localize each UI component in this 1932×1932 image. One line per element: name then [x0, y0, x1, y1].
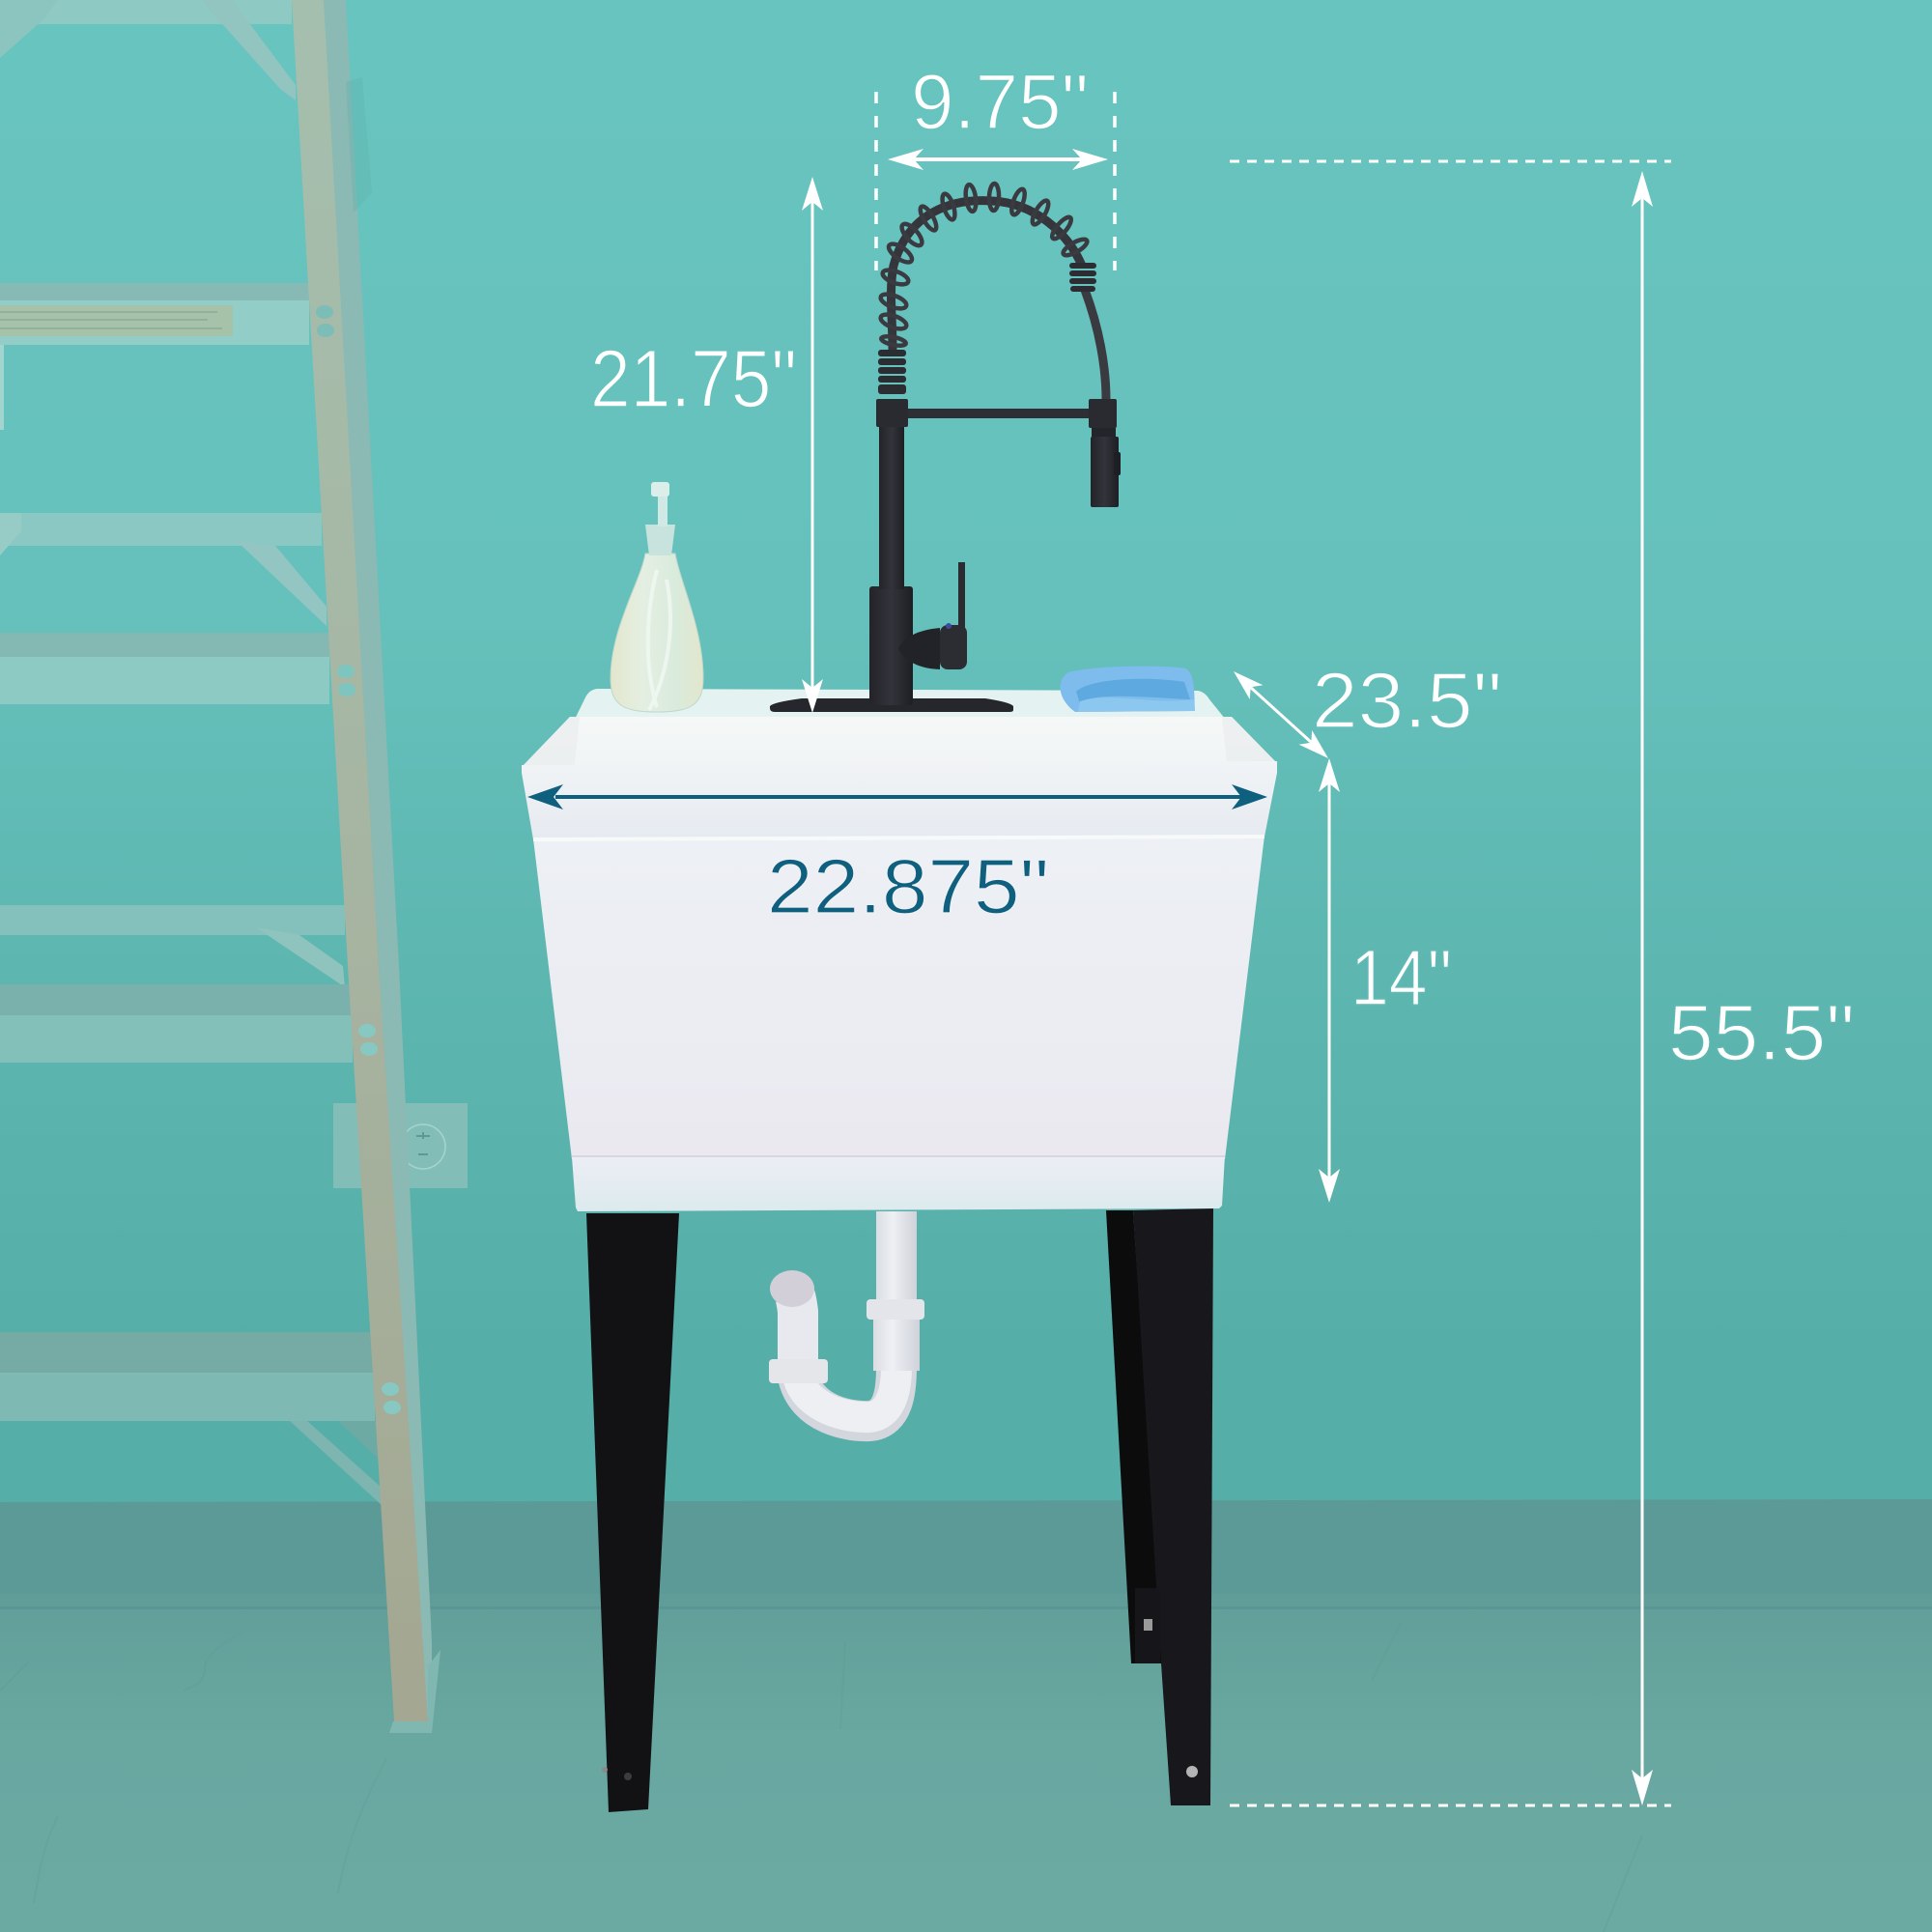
bottom lip: [572, 1155, 1225, 1211]
dashed guides: [876, 92, 1115, 270]
soap dispenser bottle: [611, 482, 703, 712]
faucet deck plate: [770, 698, 1013, 712]
basin side shading: [522, 717, 1277, 767]
faucet pull-down spring and hose: [878, 184, 1106, 400]
basin interior: [522, 717, 1277, 767]
label: 21.75": [590, 333, 797, 424]
label: 22.875": [767, 843, 1049, 929]
label: 55.5": [1668, 989, 1855, 1077]
front rim: [522, 761, 1277, 839]
label: 14": [1350, 934, 1452, 1022]
drain p-trap: [769, 1211, 924, 1421]
dimension: faucet reach 9.75 inches: [876, 59, 1115, 270]
rim highlight: [533, 835, 1264, 841]
utility sink tub: [522, 689, 1277, 1211]
sink leg: right: [1106, 1208, 1213, 1805]
rear deck: [565, 689, 1241, 739]
arrow: height: [802, 177, 823, 713]
background: wood floor: [0, 1609, 1932, 1932]
tub body: [533, 836, 1264, 1159]
dimension: depth 23.5 inches: [1234, 657, 1502, 758]
background: baseboard: [0, 1499, 1932, 1609]
dimension: width 22.875 inches: [527, 784, 1267, 929]
dimension: overall height 55.5 inches: [1230, 161, 1855, 1805]
arrow: overall height: [1632, 171, 1653, 1805]
arrow: depth: [1234, 671, 1328, 758]
dimension: faucet height 21.75 inches: [590, 177, 823, 713]
ladder steps: [0, 283, 375, 1421]
dimension: tub height 14 inches: [1319, 758, 1452, 1203]
faucet crossbar and collars: [876, 399, 1117, 428]
background: teal wall: [0, 0, 1932, 1503]
label: 9.75": [911, 59, 1089, 146]
label: 23.5": [1312, 657, 1502, 745]
arrow: tub height: [1319, 758, 1340, 1203]
dashed guides: [1230, 161, 1671, 1805]
folded blue towel: [1061, 667, 1195, 712]
arrow: reach: [888, 149, 1108, 170]
ladder braces: [0, 0, 382, 1505]
ladder rail: [292, 0, 440, 1733]
sink leg: left: [586, 1213, 679, 1812]
faucet spray head: [1091, 428, 1121, 507]
wall outlet: [333, 1103, 468, 1188]
arrow: width: [527, 784, 1267, 810]
faucet body: [869, 425, 967, 705]
stepladder: [0, 0, 440, 1733]
